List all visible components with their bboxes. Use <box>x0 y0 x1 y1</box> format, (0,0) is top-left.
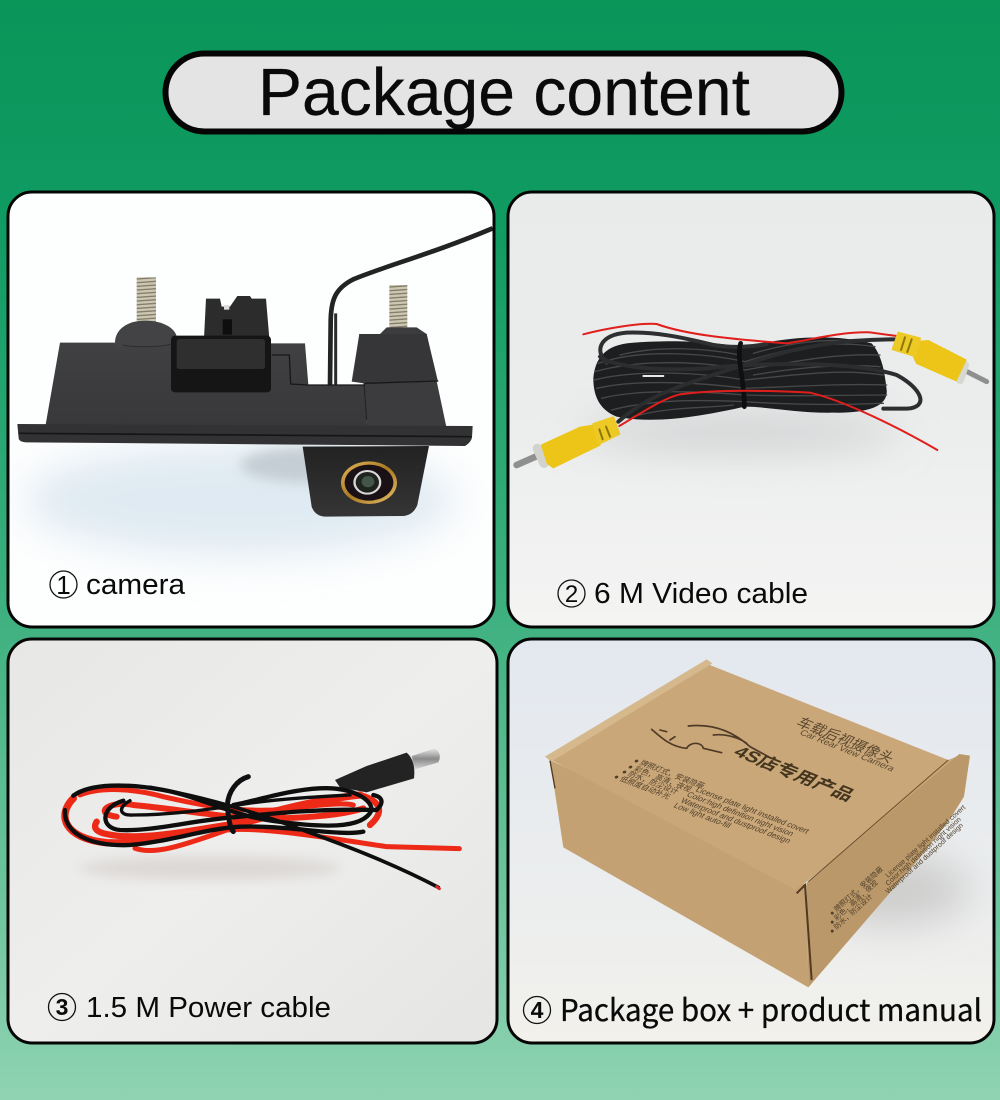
logo: car outline <box>652 726 768 757</box>
box print: side panel list: Color:high definition night vision <box>885 816 963 887</box>
box print: feature list: ● 防水，防尘设计 <box>620 767 682 796</box>
box print: feature list: ● 低照度自动补光 <box>612 772 674 801</box>
label: 6 M video cable: 6 M Video cable <box>594 578 808 610</box>
box print: model name: 车载后视摄像头 <box>792 715 898 766</box>
box print: feature list: ● 彩色，高清，夜视 <box>626 762 695 794</box>
box print text: 4S店专用产品 <box>730 742 859 805</box>
box print: feature list: Waterproof and dustproof design <box>679 796 793 845</box>
box print: model name: Car Rear View Camera <box>798 728 897 773</box>
panel: camera <box>8 192 494 627</box>
panel: power cable <box>8 639 497 1043</box>
panel: package box <box>508 639 994 1043</box>
box print: feature list: Color:high definition night vision <box>685 790 796 838</box>
label: 6 M video cable: 2 <box>565 581 578 608</box>
box print: side panel list <box>827 804 967 935</box>
box print: side panel list: License plate light installed covert <box>885 804 967 879</box>
label: 1.5 M power cable: 3 <box>56 994 68 1020</box>
label: camera: 1 <box>56 570 71 600</box>
photo: power cable with DC plug <box>65 748 459 889</box>
box print: feature list <box>612 756 812 845</box>
photo: kraft package box <box>545 659 970 987</box>
box print: feature list: License plate light installed covert <box>694 785 812 836</box>
left RCA plug <box>517 417 619 468</box>
box print: feature list: Low light auto-fill <box>672 801 733 830</box>
box print: side panel list: ● 牌照灯式，安装隐蔽 <box>827 865 885 917</box>
label: package box + product manual: Package box + product manual <box>560 986 982 1030</box>
label: package box + product manual: 4 <box>531 997 544 1023</box>
box print: side panel list: ● 防水，防尘设计 <box>827 892 874 935</box>
label: 1.5 M power cable: 1.5 M Power cable <box>86 992 331 1024</box>
label: camera: camera <box>86 569 186 601</box>
title: Package content: Package content <box>258 55 750 130</box>
box print: feature list: ● 牌照灯式，安装隐蔽 <box>632 756 708 790</box>
photo: rear view camera <box>17 228 493 517</box>
panel: video cable <box>508 192 994 627</box>
right RCA plug <box>893 333 987 382</box>
box print: side panel list: Waterproof and dustproof design <box>885 822 965 895</box>
photo: video cable coil with yellow RCA plugs <box>517 324 987 468</box>
box print: side panel list: ● 彩色，高清，夜视 <box>827 878 880 926</box>
